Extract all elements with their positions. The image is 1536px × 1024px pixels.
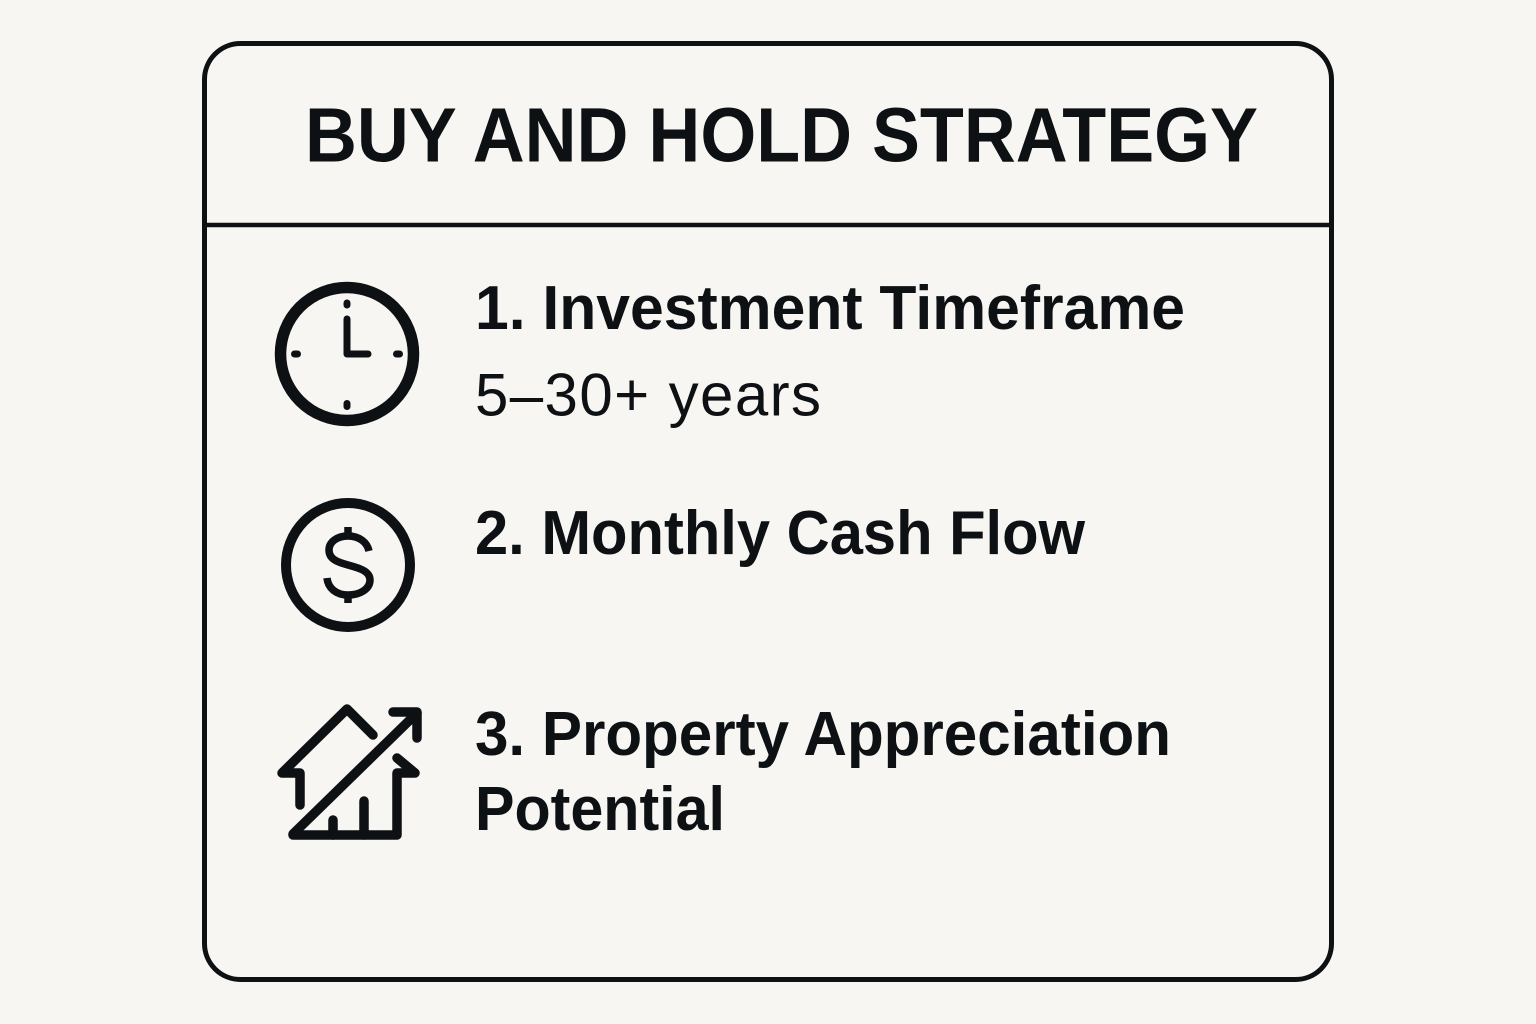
heading: investment timeframe: 1. Investment Timeframe [475, 274, 1185, 343]
heading: property appreciation potential: 3. Property Appreciation [475, 700, 1171, 769]
heading: property appreciation potential: Potential [475, 775, 725, 844]
title: BUY AND HOLD STRATEGY [305, 92, 1258, 178]
heading: monthly cash flow: 2. Monthly Cash Flow [475, 499, 1086, 568]
text: timeframe value: 5–30+ years [475, 362, 821, 428]
panel: strategy card [204, 44, 1332, 980]
icon: house with rising arrow [282, 709, 417, 835]
icon: dollar coin [286, 503, 410, 627]
icon: clock [280, 288, 414, 420]
heading: property appreciation potential [475, 700, 1171, 844]
